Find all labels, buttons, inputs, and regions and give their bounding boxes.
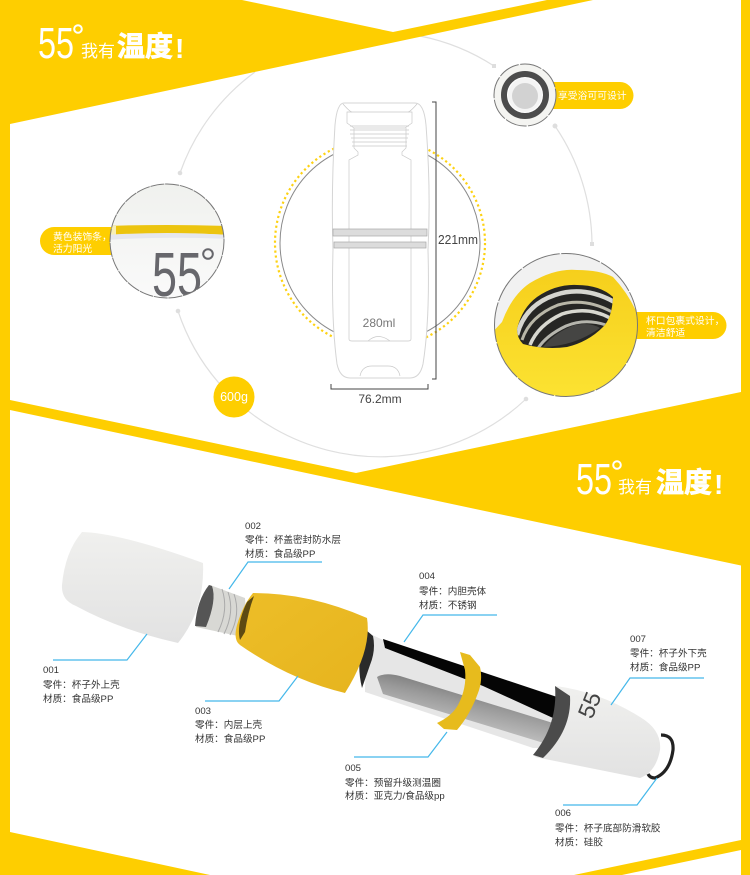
decorative arc circle <box>176 36 594 457</box>
bottom right band <box>574 840 741 875</box>
label 002: 002 <box>245 521 261 532</box>
sphere <box>494 254 638 396</box>
label 006: 材质：硅胶 <box>555 836 603 848</box>
part 006: silicone ring <box>648 735 673 778</box>
callout: yellow trim: 55 <box>152 241 202 310</box>
label 004: 材质：不锈钢 <box>419 600 477 612</box>
label: capacity: 280ml <box>363 316 395 330</box>
dark ring <box>280 143 480 343</box>
part 005: yellow ring <box>437 652 481 730</box>
dotted ring <box>275 138 485 348</box>
label 003: 003 <box>195 706 211 717</box>
heading lower: 55 <box>576 455 612 504</box>
top yellow banner <box>0 0 593 875</box>
heading top <box>38 19 184 68</box>
bottle outline <box>332 103 429 378</box>
panel: bottle size diagram <box>275 102 485 406</box>
cup opening <box>517 285 613 348</box>
pill <box>636 312 726 339</box>
bottom left corner <box>10 832 210 875</box>
label 003: 零件：内层上壳 <box>195 719 263 731</box>
label 004: 零件：内胆壳体 <box>419 586 487 598</box>
right yellow strip <box>741 0 750 875</box>
callout: yellow trim: 黄色装饰条， <box>53 230 112 243</box>
label 001: 001 <box>43 665 59 676</box>
callout: cocoa design <box>494 64 633 126</box>
dimension: width: 76.2mm <box>358 392 402 406</box>
heading top: 温度 <box>117 31 173 62</box>
label 005: 材质：亚克力/食品级pp <box>345 790 445 802</box>
part 007: white lower shell <box>533 686 660 778</box>
label 001: 材质：食品级PP <box>43 693 113 705</box>
leader lines <box>53 562 704 805</box>
part 003: yellow inner shell <box>236 593 368 693</box>
label 003 <box>195 706 265 745</box>
grey reflection <box>377 674 553 744</box>
badge: weight: 600g <box>220 390 248 404</box>
label 006: 006 <box>555 808 571 819</box>
callout: yellow trim: 活力阳光 <box>53 242 92 255</box>
label 003: 材质：食品级PP <box>195 733 265 745</box>
heading lower: ! <box>714 469 723 500</box>
dimension: width <box>331 384 428 406</box>
label 007: 材质：食品级PP <box>630 662 700 674</box>
callout: cocoa design: 享受浴可可设计 <box>558 89 627 102</box>
label 002: 零件：杯盖密封防水层 <box>245 534 341 546</box>
label 004: 004 <box>419 571 436 582</box>
part 002: threaded seal <box>195 585 245 636</box>
black reflection <box>383 639 557 718</box>
callout: wrapped rim <box>490 254 726 400</box>
label 007 <box>630 634 707 674</box>
heading top: ! <box>175 33 184 64</box>
heading lower: 我有 <box>618 478 652 497</box>
heading top: 55 <box>38 19 74 68</box>
label 004 <box>419 571 487 612</box>
pill <box>40 227 115 255</box>
callout: yellow trim <box>40 184 224 298</box>
label 001: 零件：杯子外上壳 <box>43 679 120 691</box>
sphere <box>110 184 224 298</box>
callout: wrapped rim: 杯口包裹式设计， <box>646 314 724 327</box>
part 004: steel inner body <box>359 630 558 748</box>
label 007: 零件：杯子外下壳 <box>630 648 707 660</box>
dimension: height: 221mm <box>438 233 478 247</box>
label 005: 零件：预留升级测温圈 <box>345 777 441 789</box>
heading top: 我有 <box>81 42 115 61</box>
pill <box>553 82 633 109</box>
label 006: 零件：杯子底部防滑软胶 <box>555 822 661 834</box>
middle yellow banner <box>10 392 741 566</box>
dimension: height <box>432 102 478 379</box>
heading lower <box>576 455 723 504</box>
label 007: 007 <box>630 634 646 645</box>
label 005 <box>345 763 445 802</box>
callout: wrapped rim: 清洁舒适 <box>646 326 685 339</box>
part 007: white lower shell: 55 <box>573 688 606 722</box>
heading lower: 温度 <box>656 467 712 498</box>
yellow cup <box>490 270 640 400</box>
label 002: 材质：食品级PP <box>245 548 315 560</box>
neck and chrome <box>365 632 558 748</box>
badge: weight <box>214 376 254 418</box>
label 001 <box>43 665 120 705</box>
part 001: white upper shell <box>62 532 203 643</box>
label 005: 005 <box>345 763 361 774</box>
label 002 <box>245 521 341 560</box>
label 006 <box>555 808 661 848</box>
